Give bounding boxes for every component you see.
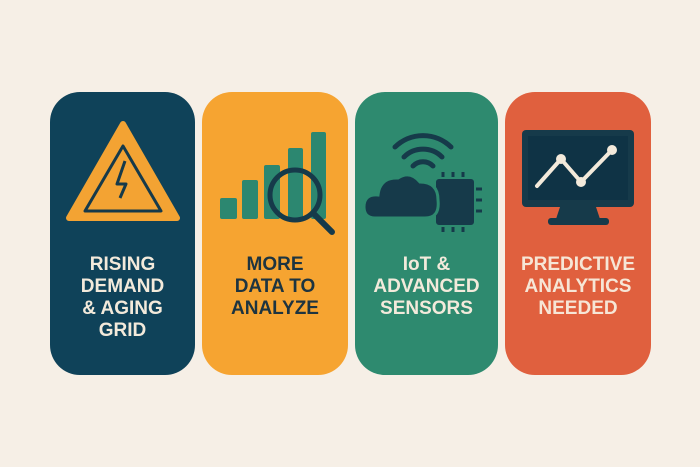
- text: iot: SENSORS: [380, 298, 473, 319]
- text: iot: [373, 254, 480, 319]
- text: rising demand: GRID: [99, 320, 146, 341]
- panel: rising demand: [50, 92, 195, 375]
- text: more data: DATA TO: [235, 276, 315, 297]
- text: rising demand: RISING: [90, 254, 155, 275]
- text: more data: ANALYZE: [231, 298, 319, 319]
- icon: warning triangle: [66, 121, 180, 221]
- icon: bar chart with magnifier: [220, 132, 335, 235]
- text: rising demand: [81, 254, 164, 341]
- text: predictive: [521, 254, 635, 319]
- text: rising demand: DEMAND: [81, 276, 164, 297]
- text: more data: MORE: [246, 254, 304, 275]
- text: rising demand: & AGING: [82, 298, 163, 319]
- text: predictive: NEEDED: [538, 298, 618, 319]
- panel: iot: [355, 92, 498, 375]
- panel: more data: [202, 92, 348, 375]
- panel: predictive: [505, 92, 651, 375]
- text: more data: [231, 254, 319, 319]
- text: predictive: ANALYTICS: [524, 276, 631, 297]
- icon: wifi cloud chip: [366, 133, 482, 232]
- text: iot: ADVANCED: [373, 276, 480, 297]
- icon: monitor with chart: [522, 130, 634, 225]
- text: iot: IoT &: [403, 254, 450, 275]
- text: predictive: PREDICTIVE: [521, 254, 635, 275]
